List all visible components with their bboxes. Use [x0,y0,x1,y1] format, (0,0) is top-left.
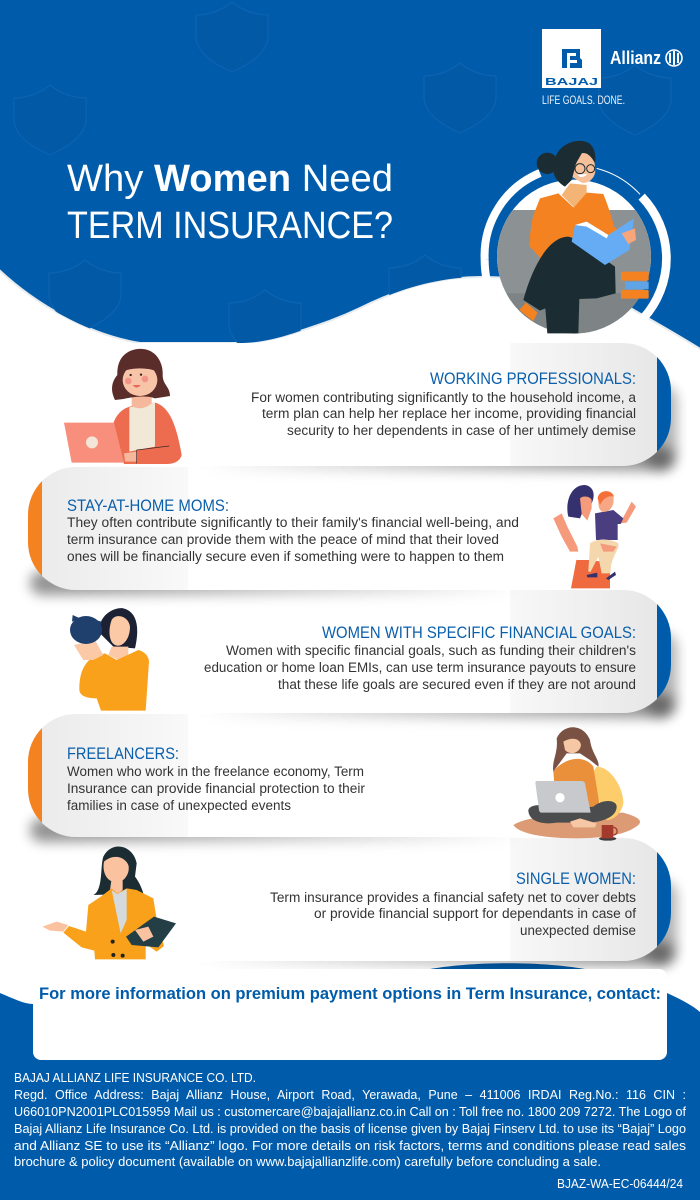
illustration: woman with laptop [64,349,182,464]
footer disclaimer text: U66010PN2001PLC015959 Mail us : customercare@bajajallianz.co.in Call on : Toll free no. 1800 209 7272. The Logo of [14,1105,687,1119]
logo: Bajaj Allianz: BAJAJ [545,76,598,88]
panel: freelancers: Women who work in the freelance economy, Term [67,764,364,779]
contact card [33,969,667,1060]
panel: freelancers [23,714,474,850]
panel: single women: SINGLE WOMEN: [516,869,636,888]
illustration: freelancer on cushion [513,727,640,841]
footer disclaimer text: and Allianz SE to use its “Allianz” logo. For more details on risk factors, terms and conditions please read sales [14,1139,686,1153]
logo: Bajaj Allianz [542,29,682,107]
panel: working professionals: term plan can help her replace her income, providing financial [262,406,636,421]
footer disclaimer text: BAJAJ ALLIANZ LIFE INSURANCE CO. LTD. [14,1071,256,1085]
panel: women with specific financial goals: education or home loan EMIs, can use term insurance payouts to ensure [204,660,636,675]
footer: blue panel [0,963,700,1200]
background shields pattern [14,2,671,360]
panel: working professionals [135,343,684,480]
panel: women with specific financial goals: that these life goals are secured even if they are not around [278,677,636,692]
panel: working professionals: WORKING PROFESSIONALS: [430,369,636,388]
panel: women with specific financial goals: Women with specific financial goals, such as funding their children's [226,643,636,658]
panel: single women: unexpected demise [520,923,636,938]
title [67,158,393,247]
logo: Bajaj Allianz: Allianz [610,48,661,68]
footer disclaimer text: brochure & policy document (available on www.bajajallianzlife.com) carefully before concluding a sale. [14,1155,601,1169]
illustration: woman with piggy bank [70,608,149,711]
panel: stay-at-home moms: They often contribute significantly to their family's financial well-being, and [67,515,519,530]
title: TERM INSURANCE? [67,205,393,247]
title: Why Women Need [67,158,393,200]
panel: stay-at-home moms: STAY-AT-HOME MOMS: [67,496,229,515]
panel: single women: or provide financial support for dependants in case of [314,906,636,921]
panel: working professionals: security to her dependents in case of her untimely demise [287,423,636,438]
panel: stay-at-home moms: ones will be financially secure even if something were to happen to them [67,549,504,564]
footer disclaimer text [14,1071,687,1191]
footer disclaimer text: BJAZ-WA-EC-06444/24 [557,1177,683,1191]
footer disclaimer text: Regd. Office Address: Bajaj Allianz House, Airport Road, Yerawada, Pune – 411006 IRDAI Reg.No.: 116 CIN : [14,1088,686,1102]
panel: freelancers: Insurance can provide financial protection to their [67,781,365,796]
contact card: For more information on premium payment options in Term Insurance, contact: [39,985,661,1003]
panel: single women: Term insurance provides a financial safety net to cover debts [270,890,636,905]
panel: women with specific financial goals: WOMEN WITH SPECIFIC FINANCIAL GOALS: [322,623,636,642]
panel: stay-at-home moms: term insurance can provide them with the peace of mind that their loved [67,532,499,547]
logo: Bajaj Allianz: LIFE GOALS. DONE. [542,95,625,107]
illustration: mother holding child [553,485,636,588]
panel: working professionals: For women contributing significantly to the household income, a [251,390,636,405]
panel: stay-at-home moms [23,467,518,603]
footer disclaimer text: Bajaj Allianz Life Insurance Co. Ltd. is provided on the basis of license given by Bajaj Finserv Ltd. to use its “Bajaj” Logo [14,1122,686,1136]
panel: women with specific financial goals [204,590,684,726]
panel: freelancers: families in case of unexpected events [67,798,291,813]
panel: single women [244,838,684,974]
illustration: hero woman reading [485,141,666,337]
illustration: business woman with folder [42,847,176,959]
header: blue wave panel [0,0,700,352]
panel: freelancers: FREELANCERS: [67,744,179,763]
